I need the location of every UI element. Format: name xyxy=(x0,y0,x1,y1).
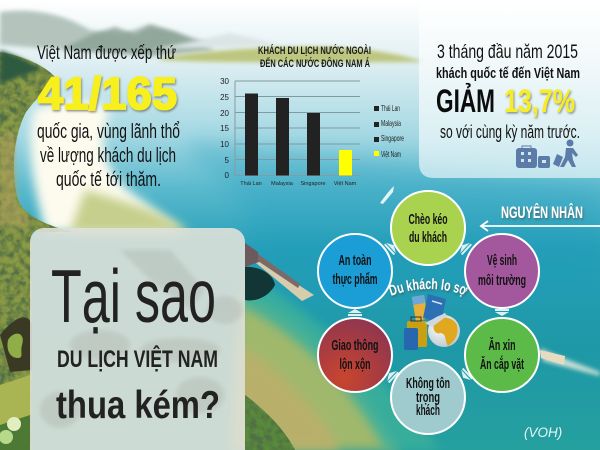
circle: lack of respect for tourists xyxy=(391,360,465,434)
sand and shallows xyxy=(30,101,185,232)
pier shadow and pier xyxy=(245,267,275,300)
title: Tại sao: Tại sao xyxy=(51,254,216,338)
x axis labels: Singapore xyxy=(300,181,326,187)
circle: beggars and petty theft: Ăn cắp vặt xyxy=(480,355,524,373)
bar chart: foreign visitors to Southeast Asian countries xyxy=(220,44,404,187)
boat and wake xyxy=(540,348,600,376)
circle: beggars and petty theft xyxy=(465,318,539,392)
circle: beggars and petty theft: Ăn xin xyxy=(488,337,516,354)
chart grid and axis xyxy=(235,81,360,176)
left forest xyxy=(0,52,72,450)
subtitle: Du lịch Việt Nam: DU LỊCH VIỆT NAM xyxy=(57,345,218,373)
bars xyxy=(245,94,352,176)
y axis labels xyxy=(220,77,230,180)
label: reasons xyxy=(481,203,600,231)
legend: Thái Lan xyxy=(381,103,400,113)
y axis labels: 10 xyxy=(220,140,230,149)
icon: traveller xyxy=(553,140,578,167)
y axis labels: 20 xyxy=(220,109,230,118)
circle: food safety xyxy=(318,234,392,308)
panel: ranking statement xyxy=(37,43,180,191)
chart title: ĐẾN CÁC NƯỚC ĐÔNG NAM Á xyxy=(260,57,370,70)
text: ranking explanation: quốc gia, vùng lãnh thổ xyxy=(37,121,180,143)
legend xyxy=(374,103,404,159)
x axis labels: Thái Lan xyxy=(240,181,262,187)
text: ranking explanation: về lượng khách du lịch xyxy=(40,145,176,167)
arrow: reasons pointer xyxy=(481,221,600,231)
legend: Việt Nam xyxy=(381,149,401,159)
circle: environmental hygiene xyxy=(465,234,539,308)
circle: lack of respect for tourists: Không tôn xyxy=(406,376,450,392)
circle: chaotic traffic: Giao thông xyxy=(332,338,378,354)
x axis labels xyxy=(240,181,357,187)
y axis labels: 15 xyxy=(220,124,230,133)
y axis labels: 0 xyxy=(225,171,230,180)
legend: Singapore xyxy=(381,133,404,143)
title: thua kém: thua kém? xyxy=(56,384,220,427)
circle: environmental hygiene: môi trường xyxy=(478,273,526,289)
cycle diagram: tourist concerns xyxy=(318,191,539,434)
icon: luggage, tickets and globe xyxy=(404,294,460,350)
number: 41/165: 41/165 xyxy=(38,68,177,119)
circle: environmental hygiene: Vệ sinh xyxy=(487,253,517,269)
circle: chaotic traffic: lộn xộn xyxy=(340,357,370,373)
x axis labels: Malaysia xyxy=(271,181,294,187)
icon: suitcases xyxy=(516,146,550,168)
y axis labels: 25 xyxy=(220,93,230,102)
number: 13,7%: 13,7% xyxy=(504,83,575,119)
chart title: KHÁCH DU LỊCH NƯỚC NGOÀI xyxy=(258,44,371,57)
circle: food safety: An toàn xyxy=(338,253,372,269)
source: VOH: (VOH) xyxy=(524,425,562,440)
panel: main title xyxy=(30,228,245,450)
chart title xyxy=(258,44,371,70)
arrows: between circles xyxy=(348,240,509,383)
circle: food safety: thực phẩm xyxy=(332,272,378,288)
circle: lack of respect for tourists: khách xyxy=(416,403,440,419)
legend: Malaysia xyxy=(381,118,401,128)
label: tourists worry: Du khách lo sợ xyxy=(388,278,470,299)
circle: attracting tourists: du khách xyxy=(409,230,447,246)
circle: attracting tourists: Chèo kéo xyxy=(408,212,448,228)
circle: lack of respect for tourists: trọng xyxy=(416,390,440,406)
faint panel photo texture xyxy=(40,250,243,428)
x axis labels: Việt Nam xyxy=(334,181,357,187)
circle: attracting tourists xyxy=(391,191,465,265)
circle: chaotic traffic xyxy=(318,318,392,392)
panel: first quarter 2015 decline xyxy=(419,0,600,178)
text: decrease: GIẢM xyxy=(436,83,495,119)
text: ranking explanation xyxy=(37,121,180,191)
text: ranking intro: Việt Nam được xếp thứ xyxy=(37,43,176,64)
y axis labels: 5 xyxy=(225,156,230,165)
y axis labels: 30 xyxy=(220,77,230,86)
text: ranking explanation: quốc tế tới thăm. xyxy=(56,169,161,191)
